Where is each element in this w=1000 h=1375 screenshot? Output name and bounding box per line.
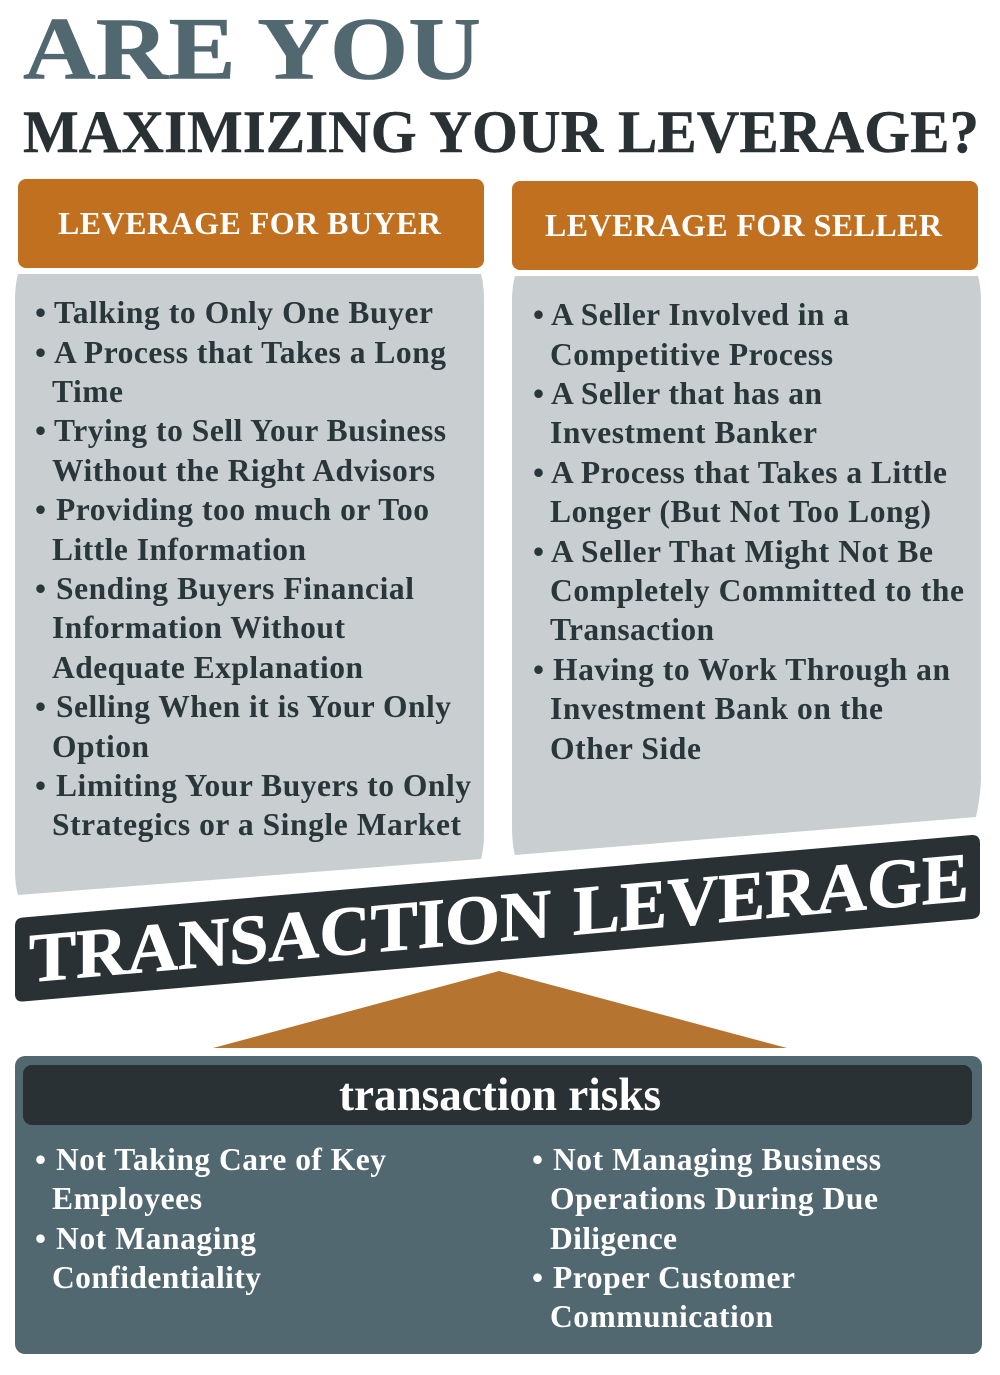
panel: seller leverage list: A Seller Involved in a <box>551 297 849 332</box>
panel: seller leverage list: A Process that Takes a Little <box>551 455 947 490</box>
panel: buyer leverage list: Limiting Your Buyers to Only <box>56 768 471 803</box>
panel: buyer leverage list: Selling When it is Your Only <box>56 689 451 724</box>
panel: seller leverage list: Longer (But Not Too Long) <box>550 494 931 529</box>
panel: seller leverage list: Completely Committed to the <box>550 573 964 608</box>
panel: seller leverage list: Competitive Process <box>550 337 833 372</box>
panel: seller leverage list: • <box>533 376 544 411</box>
panel: buyer leverage list: Without the Right Advisors <box>52 453 435 488</box>
panel: buyer leverage list: Information Without <box>52 610 346 645</box>
heading: transaction risks <box>23 1065 972 1125</box>
panel: transaction risks: Not Managing Business <box>553 1142 881 1177</box>
panel: transaction risks: • <box>532 1260 543 1295</box>
panel: transaction risks: • <box>35 1221 46 1256</box>
banner: transaction leverage: LEVERAGE <box>573 840 969 951</box>
icon: fulcrum triangle <box>213 971 787 1048</box>
panel: seller leverage list: A Seller That Might Not Be <box>551 534 933 569</box>
panel: seller leverage list: Investment Bank on the <box>550 691 883 726</box>
title: maximizing your leverage: MAXIMIZING YOUR LEVERAGE? <box>23 99 979 165</box>
banner: transaction leverage <box>15 835 980 1002</box>
panel: buyer leverage list: • <box>35 335 46 370</box>
panel: seller leverage list: Other Side <box>550 731 701 766</box>
panel: buyer leverage list: A Process that Takes a Long <box>54 335 446 370</box>
heading: transaction risks: transaction risks <box>339 1069 661 1121</box>
panel: seller leverage list: Investment Banker <box>550 415 817 450</box>
panel: buyer leverage list: Little Information <box>52 532 306 567</box>
panel: buyer leverage list: Strategics or a Single Market <box>52 807 462 842</box>
panel: transaction risks: • <box>35 1142 46 1177</box>
panel: buyer leverage list: • <box>35 768 46 803</box>
panel: buyer leverage list <box>15 274 484 895</box>
panel: buyer leverage list: • <box>35 492 46 527</box>
panel: transaction risks: • <box>532 1142 543 1177</box>
panel: transaction risks: Not Managing <box>56 1221 256 1256</box>
panel: buyer leverage list: Sending Buyers Financial <box>56 571 414 606</box>
panel: leverage for seller header <box>512 181 978 270</box>
panel: buyer leverage list: Option <box>52 729 149 764</box>
panel: seller leverage list: Having to Work Through an <box>553 652 950 687</box>
panel: seller leverage list: • <box>533 652 544 687</box>
panel: buyer leverage list: Adequate Explanation <box>52 650 363 685</box>
panel: seller leverage list <box>512 276 981 855</box>
panel: transaction risks: Diligence <box>550 1221 677 1256</box>
panel: seller leverage list: Transaction <box>550 612 714 647</box>
panel: transaction risks: Proper Customer <box>553 1260 795 1295</box>
title: are you: ARE YOU <box>23 0 481 98</box>
panel: buyer leverage list: • <box>35 413 46 448</box>
panel: buyer leverage list: Providing too much or Too <box>56 492 429 527</box>
panel: buyer leverage list: • <box>35 689 46 724</box>
panel: transaction risks: Operations During Due <box>550 1181 878 1216</box>
panel: transaction risks <box>15 1056 982 1354</box>
panel: seller leverage list: A Seller that has an <box>551 376 822 411</box>
panel: leverage for seller header: LEVERAGE FOR SELLER <box>545 207 943 243</box>
panel: transaction risks: Communication <box>550 1299 773 1334</box>
panel: seller leverage list: • <box>533 534 544 569</box>
banner: transaction leverage: TRANSACTION <box>29 876 551 998</box>
panel: leverage for buyer header <box>18 179 484 268</box>
panel: seller leverage list: • <box>533 297 544 332</box>
panel: buyer leverage list: Talking to Only One Buyer <box>54 295 433 330</box>
panel: transaction risks: Employees <box>52 1181 202 1216</box>
panel: buyer leverage list: Time <box>52 374 123 409</box>
panel: buyer leverage list: • <box>35 295 46 330</box>
panel: seller leverage list: • <box>533 455 544 490</box>
panel: buyer leverage list: Trying to Sell Your Business <box>54 413 446 448</box>
panel: leverage for buyer header: LEVERAGE FOR BUYER <box>58 205 442 241</box>
panel: buyer leverage list: • <box>35 571 46 606</box>
panel: transaction risks: Confidentiality <box>52 1260 261 1295</box>
panel: transaction risks: Not Taking Care of Key <box>56 1142 386 1177</box>
